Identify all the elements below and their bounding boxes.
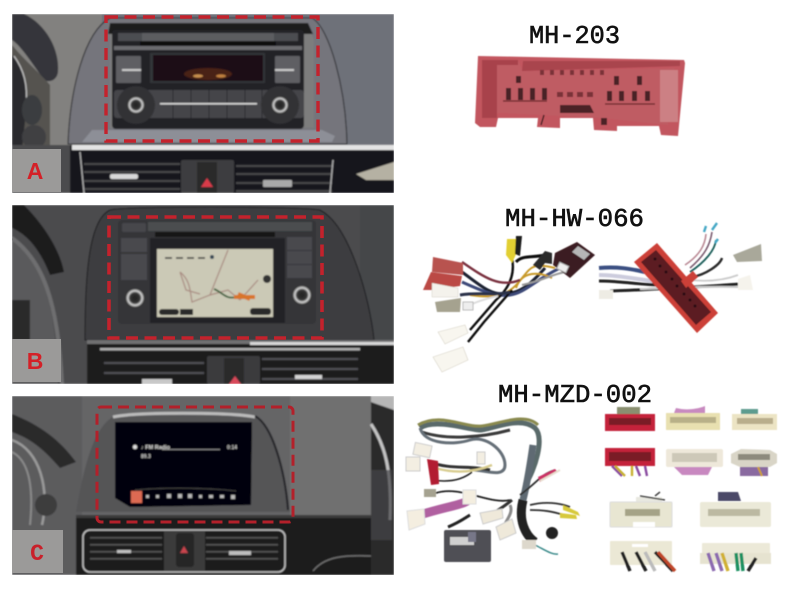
connector row 1 [605, 406, 777, 431]
panel C: touchscreen dashboard [12, 396, 394, 575]
heading MH-203: MH-203 [529, 22, 620, 51]
connector grid MH-MZD-002 [605, 406, 777, 571]
label A [12, 149, 61, 192]
harness MH-HW-066 right [599, 223, 762, 333]
panel C: touchscreen dashboard: ♪ FM Radio [141, 445, 171, 451]
connector row 3 [610, 492, 771, 527]
dashed outline B [109, 217, 322, 338]
panel A: basic radio dashboard [12, 14, 394, 193]
connector row 2 [605, 448, 777, 476]
label C: C [30, 541, 44, 567]
connector MH-203 [475, 56, 685, 136]
label A: A [27, 158, 43, 184]
heading MH-MZD-002: MH-MZD-002 [498, 381, 652, 410]
harness MH-HW-066 left [423, 236, 595, 372]
harness MH-MZD-002 left [406, 419, 580, 562]
panel B: navigation radio dashboard [12, 205, 394, 384]
label B: B [27, 348, 43, 374]
connector row 4 [610, 541, 771, 571]
dashed outline C [97, 407, 293, 522]
panel C: touchscreen dashboard: 89.3 [141, 454, 151, 460]
heading MH-HW-066: MH-HW-066 [505, 205, 644, 234]
dashed outline A [106, 17, 318, 141]
label B [12, 339, 61, 382]
label C [12, 530, 63, 573]
panel C: touchscreen dashboard: 0:14 [227, 445, 237, 451]
